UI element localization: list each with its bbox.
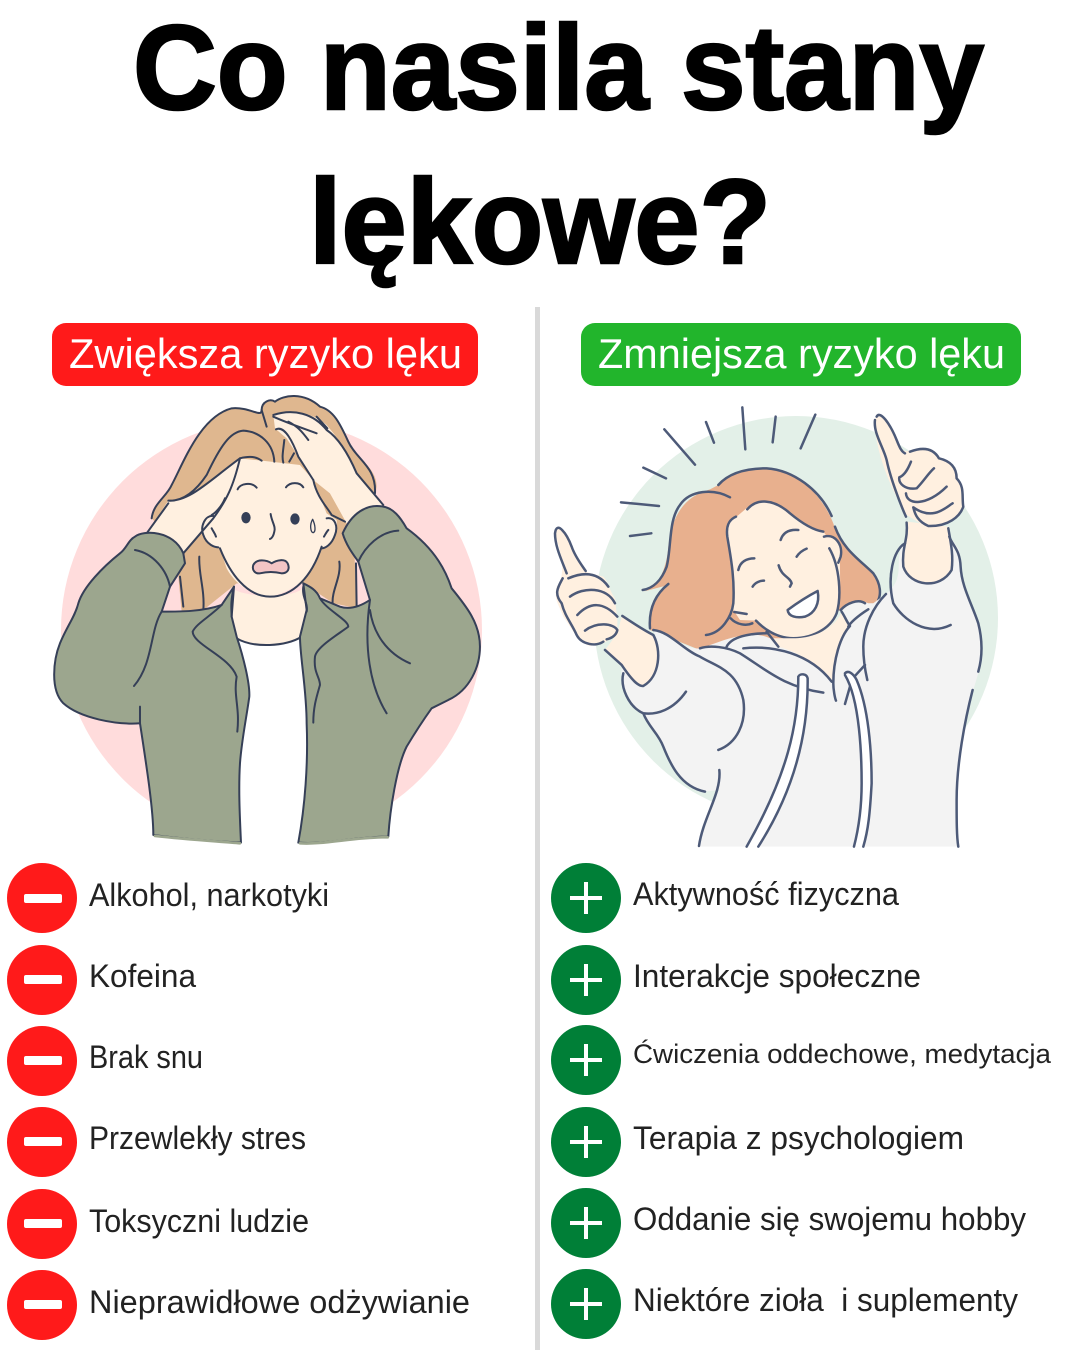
item: breathing and meditation	[551, 1025, 1052, 1095]
item: physical activity: Aktywność fizyczna	[633, 876, 899, 912]
item: lack of sleep	[7, 1026, 203, 1096]
item: social interaction: Interakcje społeczne	[633, 958, 921, 994]
item: therapy	[551, 1107, 964, 1177]
item: therapy: Terapia z psychologiem	[633, 1120, 964, 1156]
item: breathing and meditation: Ćwiczenia oddechowe, medytacja	[633, 1038, 1052, 1069]
title: lękowe?	[309, 155, 771, 289]
panel: reduces anxiety risk	[551, 323, 1052, 1339]
item: lack of sleep: Brak snu	[89, 1039, 203, 1075]
item: alcohol: Alkohol, narkotyki	[89, 877, 329, 913]
illustration: stressed woman	[54, 396, 482, 844]
item: hobby	[551, 1188, 1026, 1258]
illustration: happy woman with thumbs up	[555, 407, 998, 847]
item: poor diet	[7, 1270, 470, 1340]
item: social interaction	[551, 945, 921, 1015]
item: herbs and supplements: Niektóre zioła i suplementy	[633, 1282, 1018, 1318]
title	[133, 1, 984, 289]
item: caffeine	[7, 945, 196, 1015]
heading: increases risk	[52, 323, 478, 386]
item: alcohol	[7, 863, 329, 933]
item: chronic stress: Przewlekły stres	[89, 1120, 306, 1156]
title: Co nasila stany	[133, 1, 984, 135]
panel: increases anxiety risk	[7, 323, 482, 1340]
item: caffeine: Kofeina	[89, 958, 196, 994]
risk list	[7, 863, 470, 1340]
item: toxic people: Toksyczni ludzie	[89, 1203, 309, 1239]
heading: reduces risk: Zmniejsza ryzyko lęku	[598, 330, 1005, 377]
item: toxic people	[7, 1189, 309, 1259]
heading: increases risk: Zwiększa ryzyko lęku	[69, 330, 462, 377]
protective factors list	[551, 863, 1052, 1339]
item: herbs and supplements	[551, 1269, 1018, 1339]
item: hobby: Oddanie się swojemu hobby	[633, 1201, 1026, 1237]
item: physical activity	[551, 863, 899, 933]
item: poor diet: Nieprawidłowe odżywianie	[89, 1284, 470, 1320]
item: chronic stress	[7, 1107, 306, 1177]
